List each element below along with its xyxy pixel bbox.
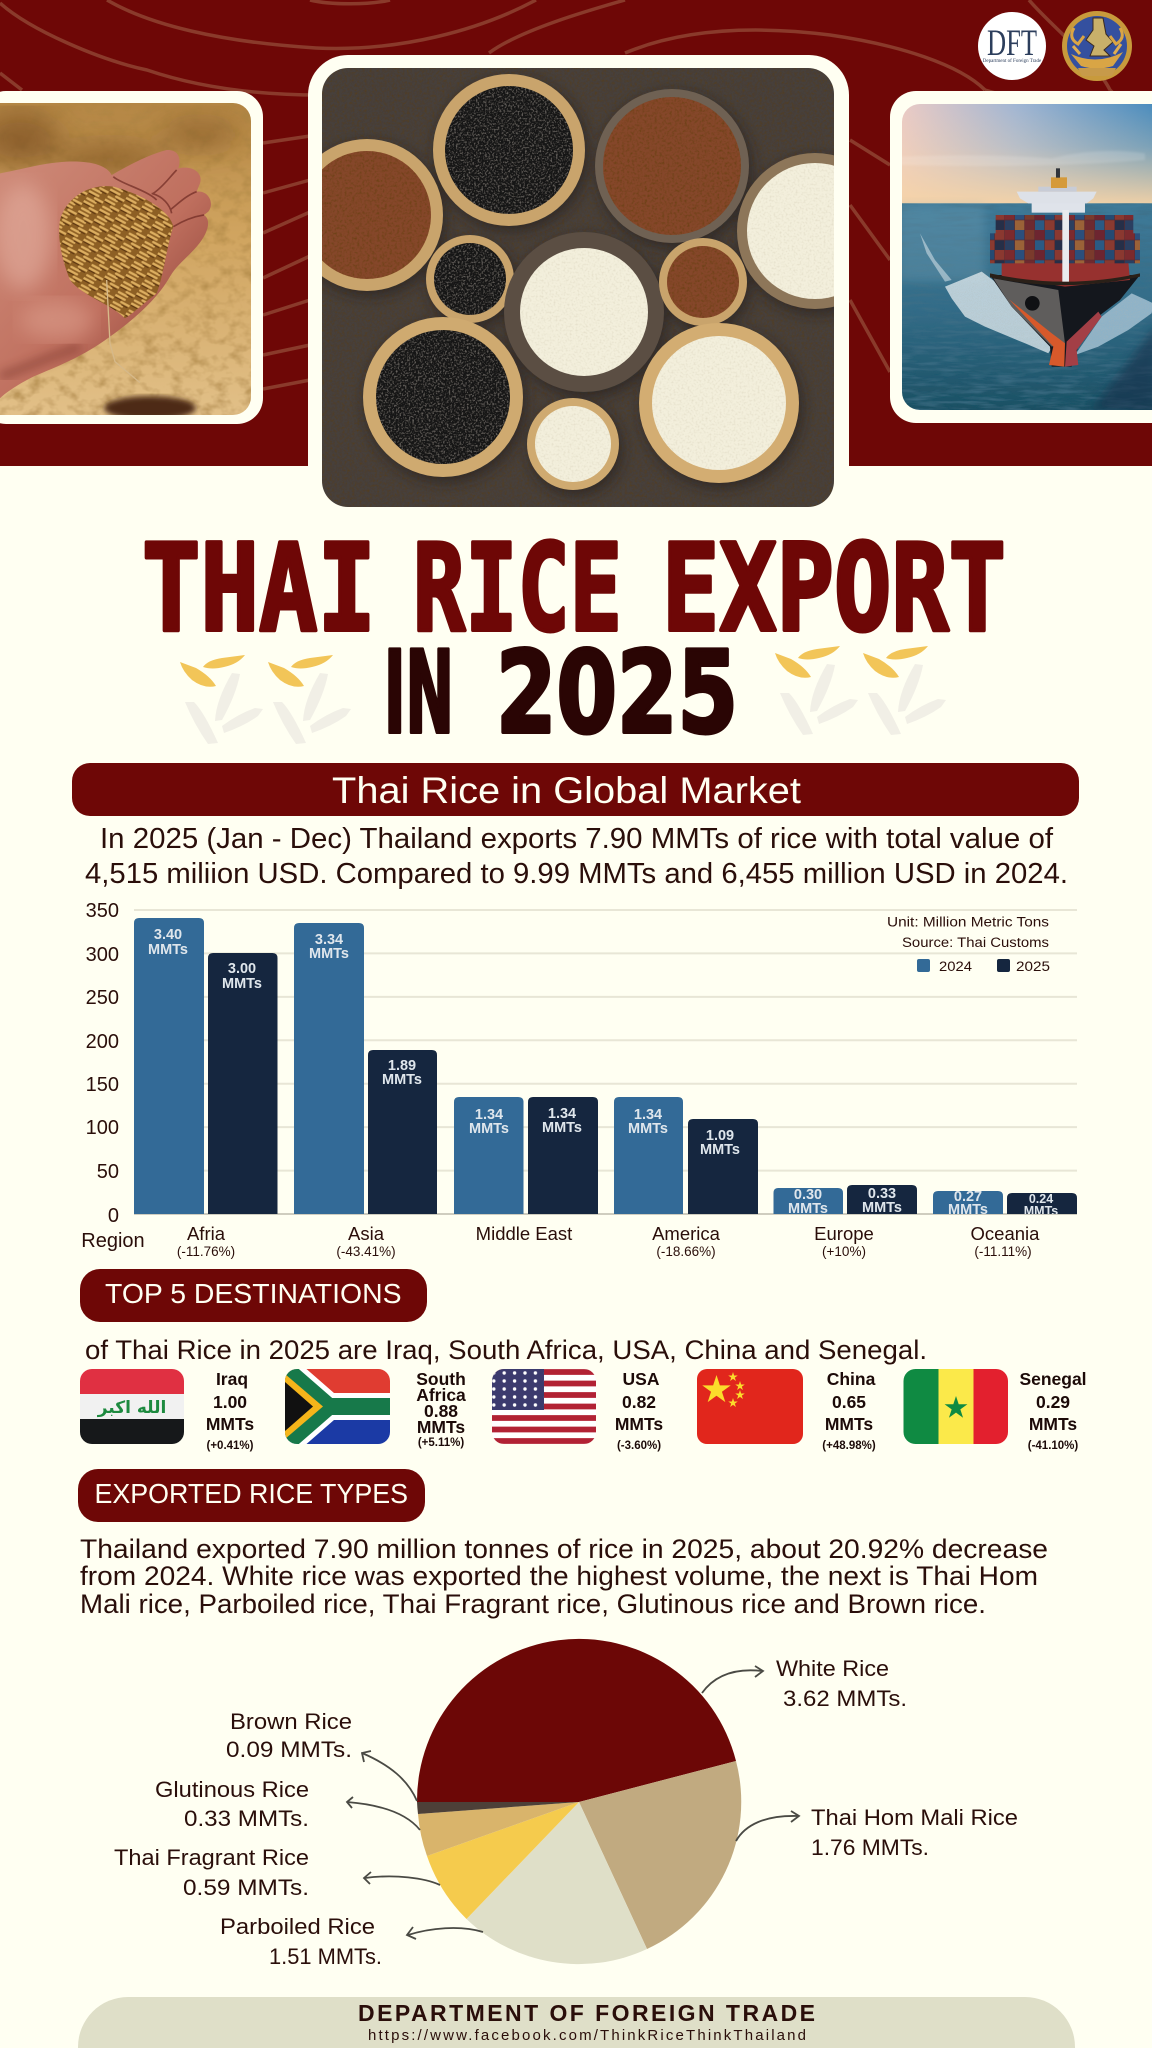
bar value labels xyxy=(148,927,1058,1218)
bar value labels: MMTs xyxy=(1024,1204,1058,1218)
bar value labels: 0.33 xyxy=(868,1186,896,1202)
text: rice types summary xyxy=(80,1534,1048,1619)
heading: exported rice types xyxy=(78,1469,425,1522)
bar value labels: MMTs xyxy=(469,1121,509,1137)
label: Thai Hom Mali rice: Thai Hom Mali Rice xyxy=(811,1805,1018,1830)
title: in 2025: 2025 xyxy=(496,627,738,759)
region labels: Middle East xyxy=(476,1223,572,1244)
bar value labels: MMTs xyxy=(788,1201,828,1217)
China value: 0.65 xyxy=(832,1392,866,1412)
black rice xyxy=(376,86,573,464)
label: glutinous rice: Glutinous Rice xyxy=(155,1777,309,1802)
text: global market summary xyxy=(85,823,1068,890)
flag: China xyxy=(697,1369,803,1444)
header band xyxy=(0,0,1152,466)
label: parboiled rice: 1.51 MMTs. xyxy=(269,1944,382,1969)
China value: MMTs xyxy=(825,1414,873,1434)
bar value labels: MMTs xyxy=(700,1142,740,1158)
bar value labels: 1.34 xyxy=(475,1107,503,1123)
text: rice types summary: from 2024. White rice was exported the highest volume, the next is Thai Hom xyxy=(80,1561,1038,1591)
title: Thai Rice Export xyxy=(142,520,1006,659)
bar value labels: MMTs xyxy=(862,1200,902,1216)
label: glutinous rice: 0.33 MMTs. xyxy=(184,1806,309,1831)
title: Thai Rice Export: EXPORT xyxy=(662,520,1006,659)
region labels xyxy=(81,1223,1040,1259)
chart legend and source: 2025 xyxy=(1016,959,1050,974)
text: top destinations sentence: of Thai Rice in 2025 are Iraq, South Africa, USA, China and Senegal. xyxy=(85,1335,927,1365)
heading: exported rice types: EXPORTED RICE TYPES xyxy=(94,1478,408,1509)
region labels: Europe xyxy=(814,1223,874,1244)
bar value labels: MMTs xyxy=(542,1120,582,1136)
y axis labels: 0 xyxy=(108,1205,119,1227)
flag: Iraq xyxy=(80,1369,184,1444)
label: Thai fragrant rice: Thai Fragrant Rice xyxy=(114,1845,309,1870)
chart legend and source xyxy=(887,914,1050,974)
bar value labels: MMTs xyxy=(309,946,349,962)
region labels: America xyxy=(652,1223,721,1244)
logo: ministry seal xyxy=(1062,11,1132,81)
label: brown rice: 0.09 MMTs. xyxy=(226,1737,352,1762)
Senegal value: MMTs xyxy=(1029,1414,1077,1434)
South Africa value: MMTs xyxy=(417,1417,465,1437)
region labels: Oceania xyxy=(971,1223,1040,1244)
text: rice types summary: Mali rice, Parboiled rice, Thai Fragrant rice, Glutinous rice and Brown rice. xyxy=(80,1589,986,1619)
logo: DFT: DFT xyxy=(987,23,1037,64)
logo: DFT: Department of Foreign Trade xyxy=(983,59,1042,64)
heading: top 5 destinations: TOP 5 DESTINATIONS xyxy=(105,1278,402,1309)
label: Thai fragrant rice xyxy=(114,1845,309,1900)
footer band: https://www.facebook.com/ThinkRiceThinkThailand xyxy=(368,2027,806,2044)
bar value labels: 1.34 xyxy=(634,1107,662,1123)
USA value: USA xyxy=(623,1369,660,1389)
China value: (+48.98%) xyxy=(822,1440,876,1452)
heading: top 5 destinations xyxy=(80,1269,427,1322)
dark blotches in rice background xyxy=(0,112,240,176)
label: parboiled rice: Parboiled Rice xyxy=(220,1914,375,1939)
bars 2024 xyxy=(134,918,1003,1214)
bar value labels: MMTs xyxy=(628,1121,668,1137)
bar value labels: 1.34 xyxy=(548,1106,576,1122)
heading: Thai Rice in Global Market: Thai Rice in Global Market xyxy=(332,770,802,811)
region labels: (+10%) xyxy=(822,1244,866,1259)
Senegal value: (-41.10%) xyxy=(1028,1440,1078,1452)
photo: bowls of different rice xyxy=(308,55,849,507)
Iraq value: (+0.41%) xyxy=(207,1440,254,1452)
bar value labels: MMTs xyxy=(148,942,188,958)
logo: DFT xyxy=(978,12,1046,80)
Senegal value: Senegal xyxy=(1019,1369,1087,1389)
white rice xyxy=(520,163,834,482)
title: Thai Rice Export: RICE xyxy=(413,520,622,659)
bowl shadows xyxy=(322,78,834,498)
flag: South Africa xyxy=(285,1369,390,1444)
wooden bowl rims xyxy=(322,74,834,490)
South Africa value: South xyxy=(416,1369,466,1389)
y axis labels: 100 xyxy=(86,1117,119,1139)
flag: Senegal xyxy=(904,1369,1008,1444)
bars 2025 xyxy=(208,953,1077,1214)
bar value labels: MMTs xyxy=(948,1202,988,1218)
bar chart: exports by region xyxy=(81,900,1077,1259)
y axis labels: 200 xyxy=(86,1031,119,1053)
foam wake xyxy=(920,233,952,282)
hull xyxy=(990,275,1140,367)
China value xyxy=(822,1369,876,1452)
bar value labels: MMTs xyxy=(382,1072,422,1088)
title: in 2025 xyxy=(384,627,738,759)
flag: Iraq: الله اكبر xyxy=(97,1398,166,1418)
bar value labels: 3.00 xyxy=(228,961,256,977)
bar value labels: MMTs xyxy=(222,976,262,992)
y axis labels: 250 xyxy=(86,987,119,1009)
text: global market summary: 4,515 miliion USD. Compared to 9.99 MMTs and 6,455 million USD in 2024. xyxy=(85,858,1068,890)
Iraq value: 1.00 xyxy=(213,1392,247,1412)
region labels: Afria xyxy=(187,1223,226,1244)
region labels: (-11.11%) xyxy=(974,1244,1032,1259)
chart legend and source: Unit: Million Metric Tons xyxy=(887,914,1049,930)
text: global market summary: In 2025 (Jan - Dec) Thailand exports 7.90 MMTs of rice with total value of xyxy=(100,823,1054,855)
chart legend and source: Source: Thai Customs xyxy=(902,935,1049,950)
Iraq value: MMTs xyxy=(206,1414,254,1434)
text: rice types summary: Thailand exported 7.90 million tonnes of rice in 2025, about 20.92% decrease xyxy=(80,1534,1048,1564)
arrows: pie callouts xyxy=(347,1666,799,1939)
y axis labels: 350 xyxy=(86,900,119,922)
heading: Thai Rice in Global Market xyxy=(72,763,1079,816)
footer band: DEPARTMENT OF FOREIGN TRADE xyxy=(358,2000,815,2026)
label: white rice xyxy=(776,1656,907,1711)
label: brown rice: Brown Rice xyxy=(230,1709,352,1734)
photo: container ship xyxy=(890,91,1152,423)
y axis labels xyxy=(86,900,119,1227)
bar value labels: 1.89 xyxy=(388,1058,416,1074)
y axis labels: 50 xyxy=(97,1161,119,1183)
region labels: (-18.66%) xyxy=(656,1244,716,1259)
region labels: (-11.76%) xyxy=(177,1244,235,1259)
bar value labels: 1.09 xyxy=(706,1128,734,1144)
icon: rice grains left xyxy=(180,655,351,744)
label: Thai Hom Mali rice xyxy=(811,1805,1018,1860)
bar value labels: 3.40 xyxy=(154,927,182,943)
region labels: Asia xyxy=(348,1223,385,1244)
USA value: 0.82 xyxy=(622,1392,656,1412)
Iraq value: Iraq xyxy=(216,1369,248,1389)
label: parboiled rice xyxy=(220,1914,382,1969)
title: Thai Rice Export: THAI xyxy=(142,520,376,659)
y axis labels: 300 xyxy=(86,944,119,966)
flag: USA xyxy=(492,1369,596,1444)
destination values xyxy=(206,1369,1087,1452)
photo: hand holding paddy rice xyxy=(0,91,263,424)
USA value: (-3.60%) xyxy=(617,1440,661,1452)
South Africa value: 0.88 xyxy=(424,1401,458,1421)
South Africa value: Africa xyxy=(416,1385,466,1405)
South Africa value: (+5.11%) xyxy=(418,1437,464,1449)
label: glutinous rice xyxy=(155,1777,309,1831)
bar value labels: 0.24 xyxy=(1029,1192,1053,1206)
footer band xyxy=(78,1997,1075,2048)
China value: China xyxy=(827,1369,876,1389)
y axis labels: 150 xyxy=(86,1074,119,1096)
Senegal value: 0.29 xyxy=(1036,1392,1070,1412)
chart legend and source: 2024 xyxy=(939,959,973,974)
label: brown rice xyxy=(226,1709,352,1762)
label: Thai Hom Mali rice: 1.76 MMTs. xyxy=(811,1835,929,1860)
USA value xyxy=(615,1369,663,1452)
title: in 2025: IN xyxy=(384,627,454,759)
pie chart: rice types xyxy=(417,1639,741,1964)
bar value labels: 3.34 xyxy=(315,932,343,948)
bar value labels: 0.30 xyxy=(794,1187,822,1203)
Senegal value xyxy=(1019,1369,1087,1452)
y axis grid lines xyxy=(134,910,1077,1214)
label: white rice: 3.62 MMTs. xyxy=(783,1686,907,1711)
region labels: Region xyxy=(81,1230,145,1252)
icon: rice grains right xyxy=(775,646,946,735)
Iraq value xyxy=(206,1369,254,1452)
bar value labels: 0.27 xyxy=(954,1189,982,1205)
USA value: MMTs xyxy=(615,1414,663,1434)
label: Thai fragrant rice: 0.59 MMTs. xyxy=(183,1875,309,1900)
label: white rice: White Rice xyxy=(776,1656,889,1681)
region labels: (-43.41%) xyxy=(336,1244,396,1259)
brown rice xyxy=(303,97,741,318)
South Africa value xyxy=(416,1369,466,1449)
